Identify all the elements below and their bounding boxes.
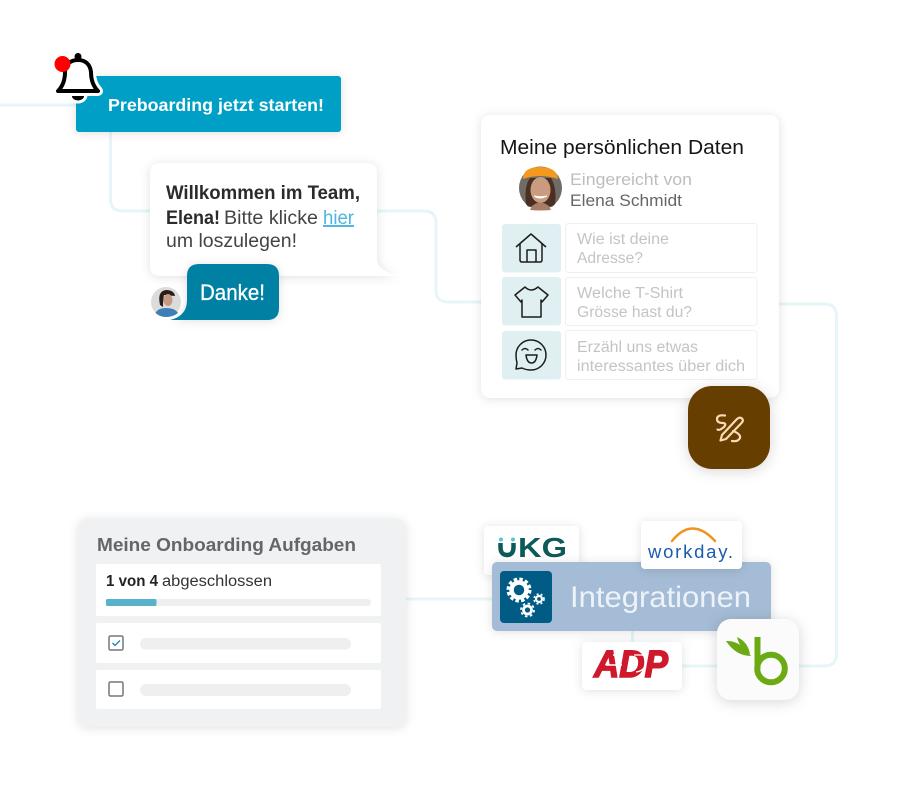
heading: Meine Onboarding Aufgaben: Meine Onboarding Aufgaben	[97, 534, 356, 555]
chat bubble: welcome message: um loszulegen!	[166, 230, 297, 252]
icon: house	[516, 234, 546, 262]
progress card	[96, 564, 381, 616]
submitted by	[570, 170, 692, 210]
logo card: Workday: workday.	[647, 541, 733, 562]
logo card: UKG	[484, 526, 579, 575]
submitted by: Elena Schmidt	[570, 191, 682, 210]
icon: notification bell	[54, 50, 98, 101]
chat bubble: welcome message	[150, 163, 399, 276]
form row: address	[502, 224, 757, 272]
form row: about you: interessantes über dich	[577, 358, 745, 375]
logo card: Workday	[641, 521, 742, 569]
progress card: 1 von 4	[106, 573, 158, 590]
connector lines	[0, 105, 836, 666]
logo card: ADP: ADP	[593, 644, 669, 686]
panel: onboarding tasks	[78, 519, 406, 727]
chat bubble: Danke: Danke!	[200, 280, 265, 305]
chat bubble: welcome message: hier	[323, 207, 354, 229]
chat bubble: Danke	[170, 264, 279, 320]
form row: t-shirt	[502, 277, 757, 326]
progress card: abgeschlossen	[162, 573, 272, 590]
task row: checked	[96, 623, 381, 663]
submitted by: Eingereicht von	[570, 170, 692, 189]
avatar: Elena Schmidt with helmet	[519, 166, 562, 210]
button: Preboarding jetzt starten: Preboarding jetzt starten!	[108, 95, 324, 115]
form row: about you: Erzähl uns etwas	[577, 339, 698, 356]
bar: Integrationen	[492, 562, 771, 631]
logo card: BambooHR	[717, 619, 799, 700]
icon: pencil with squiggle	[717, 415, 743, 441]
chat bubble: welcome message: Willkommen im Team,	[166, 182, 360, 204]
task row: unchecked	[96, 670, 381, 709]
chat bubble: welcome message: Elena!	[166, 207, 220, 229]
form row: t-shirt: Grösse hast du?	[577, 304, 692, 321]
chat bubble: welcome message: Bitte klicke	[224, 207, 318, 229]
form row: about you	[502, 330, 757, 380]
icon: smiling speech bubble	[516, 340, 546, 370]
icon: gears	[500, 571, 552, 623]
heading: Meine persönlichen Daten: Meine persönlichen Daten	[500, 136, 744, 159]
button: Preboarding jetzt starten	[76, 76, 341, 132]
form row: t-shirt: Welche T-Shirt	[577, 285, 684, 302]
icon: t-shirt	[515, 287, 548, 317]
logo card: UKG: KG	[518, 532, 567, 563]
bar: Integrationen: Integrationen	[570, 581, 751, 614]
form row: address: Adresse?	[577, 250, 643, 267]
form row: address: Wie ist deine	[577, 231, 669, 248]
button: edit signature	[688, 386, 770, 469]
panel: personal data	[481, 115, 779, 398]
avatar: Elena small	[150, 286, 183, 319]
